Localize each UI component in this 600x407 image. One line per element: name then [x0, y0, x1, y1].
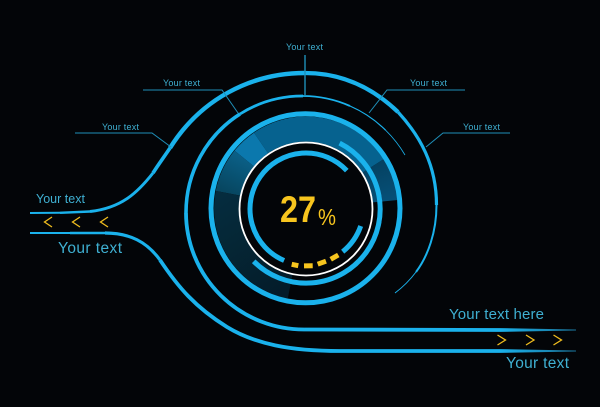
leader lines — [75, 55, 510, 147]
label: right upper flow: Your text here — [449, 306, 544, 323]
label: top: Your text — [286, 42, 323, 52]
gauge middle arc — [254, 143, 380, 283]
label: mid left: Your text — [102, 122, 139, 132]
icon: left chevrons — [44, 217, 108, 227]
label: right lower flow: Your text — [506, 355, 570, 372]
percentage value: 27 — [280, 189, 316, 230]
label: left upper flow: Your text — [36, 192, 86, 206]
yellow dashes — [292, 255, 338, 266]
percentage value: % — [318, 204, 336, 230]
label: mid right: Your text — [463, 122, 500, 132]
label: upper right: Your text — [410, 78, 447, 88]
label: upper left: Your text — [163, 78, 200, 88]
label: left lower flow: Your text — [58, 240, 123, 257]
icon: right chevrons — [498, 335, 562, 345]
gauge band sectors — [227, 129, 385, 286]
white circle — [240, 142, 372, 276]
outer spiral line — [30, 73, 436, 293]
inner progress arc — [250, 153, 361, 260]
lower flow line — [30, 233, 576, 353]
gauge outer ring — [211, 114, 400, 303]
second spiral line — [186, 96, 576, 332]
